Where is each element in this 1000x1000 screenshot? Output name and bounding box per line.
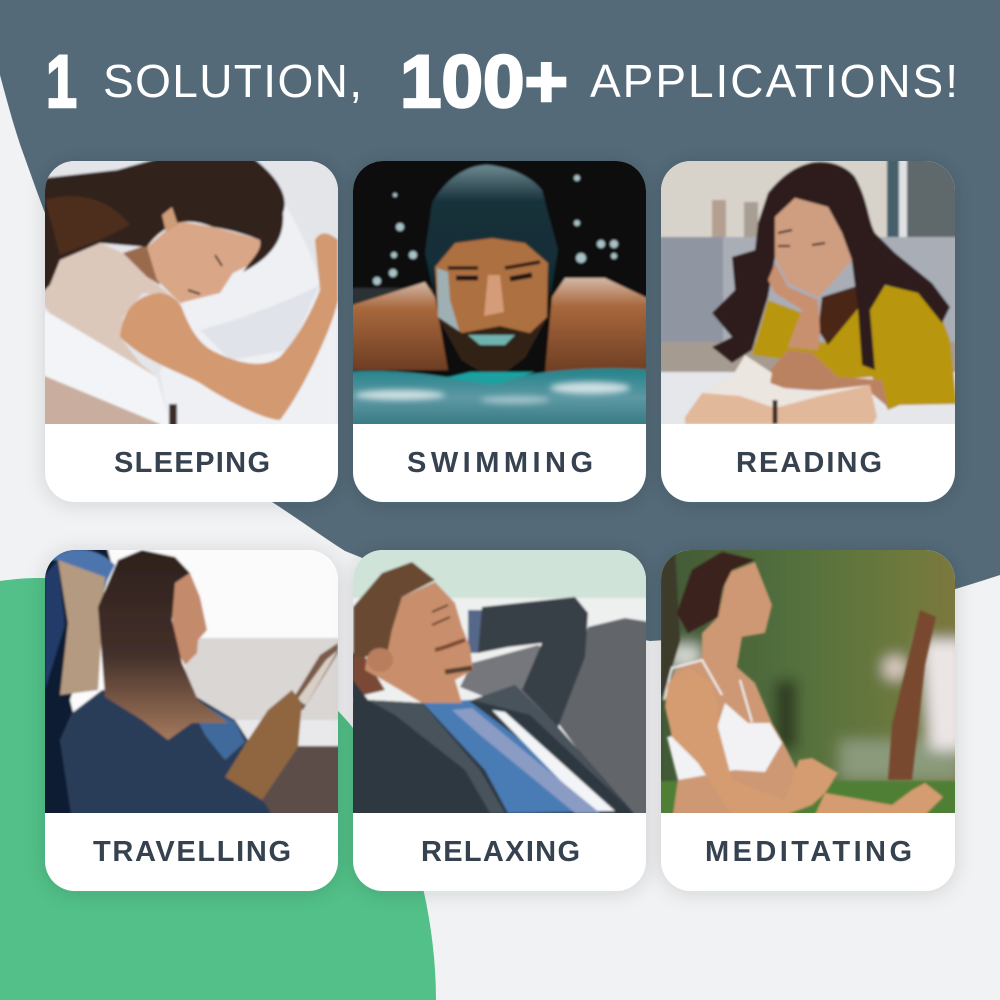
photo: woman sleeping <box>45 161 338 424</box>
label: TRAVELLING <box>93 836 291 868</box>
label: RELAXING <box>421 836 580 868</box>
photo: swimmer <box>353 161 646 424</box>
card: sleeping <box>35 151 348 502</box>
title: 1 <box>46 40 77 123</box>
card: meditating <box>654 550 962 900</box>
label: READING <box>736 447 882 479</box>
title: SOLUTION, <box>103 55 362 107</box>
label: SLEEPING <box>114 447 270 479</box>
background blob: dark slate <box>0 0 1000 641</box>
title: 100+ <box>400 40 568 123</box>
background blob: green <box>0 578 436 1000</box>
photo: man relaxing on sofa <box>353 550 646 813</box>
photo: woman meditating outdoors <box>661 550 955 813</box>
label: MEDITATING <box>705 836 912 868</box>
photo: woman reading <box>661 161 955 424</box>
title <box>46 40 958 123</box>
photo: woman on a tablet <box>45 550 338 813</box>
card: swimming <box>343 151 656 502</box>
label: SWIMMING <box>407 447 593 479</box>
card: reading <box>651 151 965 502</box>
title: APPLICATIONS! <box>590 55 958 107</box>
card: relaxing <box>343 540 656 891</box>
card: travelling <box>35 540 348 891</box>
